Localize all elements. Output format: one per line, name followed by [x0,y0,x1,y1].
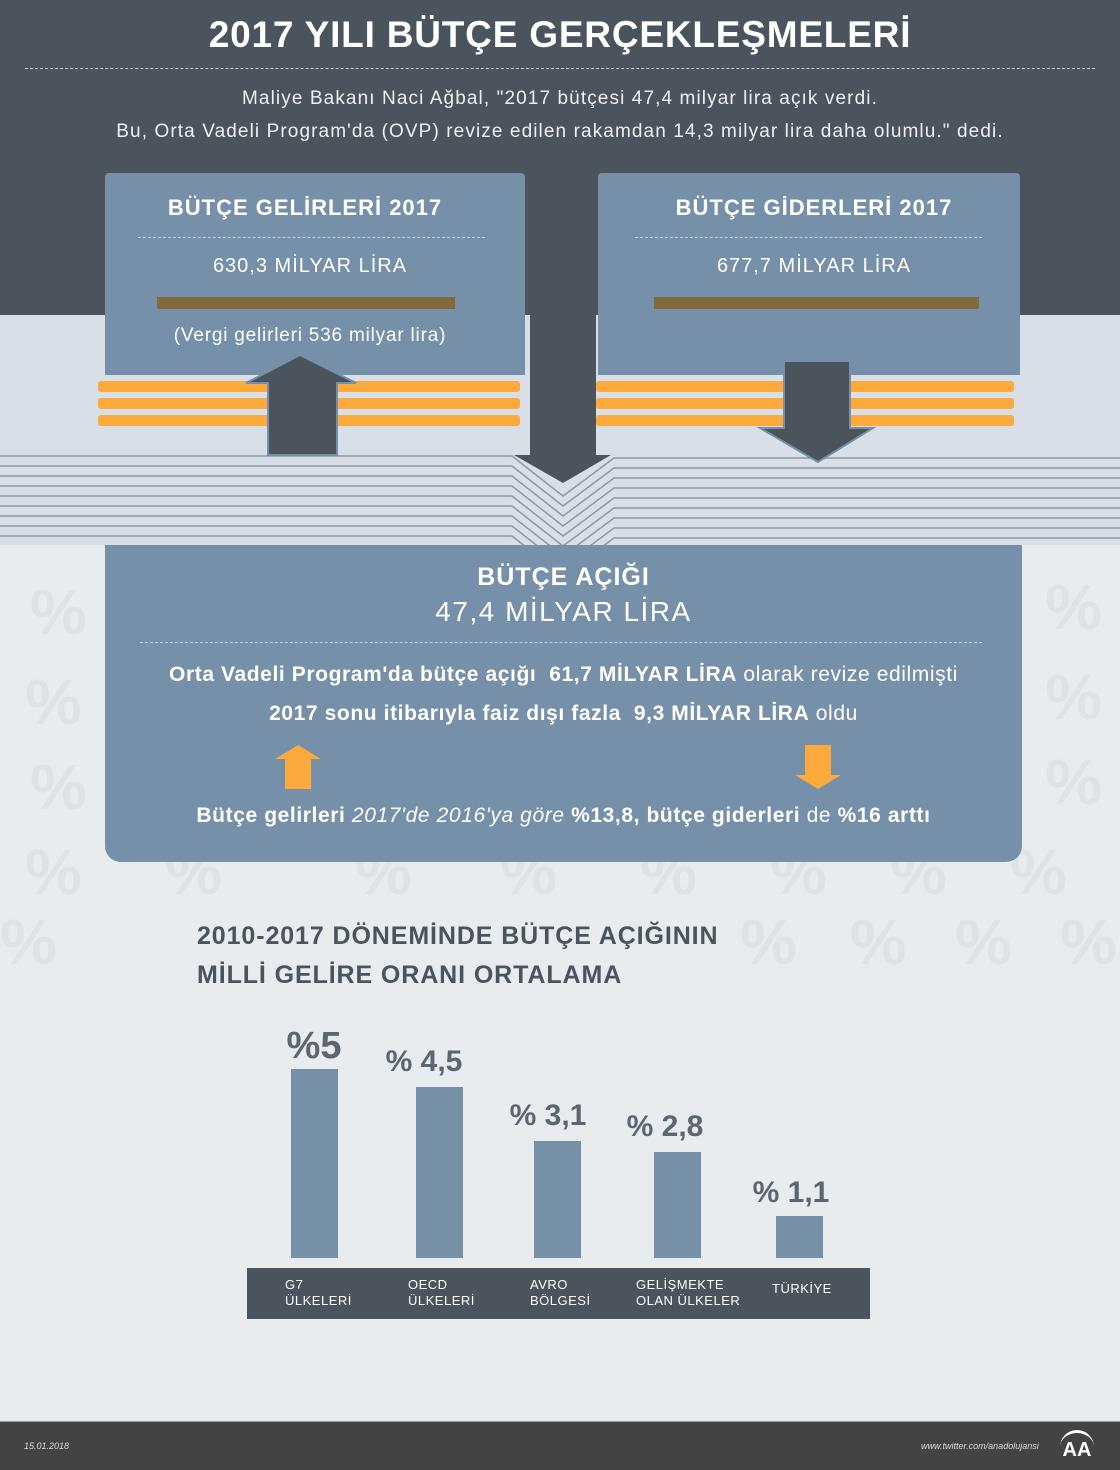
bar chart: % 3,1 [510,1099,586,1132]
bar chart: G7 [285,1277,303,1292]
footer: www.twitter.com/anadolujansi [921,1441,1039,1451]
background pattern: % [500,836,557,908]
background pattern: % [640,836,697,908]
footer [0,1421,1120,1470]
bar chart: % 4,5 [386,1045,462,1078]
background pattern [0,571,1117,978]
panel: budget deficit: 47,4 MİLYAR LİRA [435,596,692,627]
arrows [246,315,876,483]
bar chart: ÜLKELERİ [408,1293,475,1308]
background pattern: % [850,906,907,978]
background pattern: % [165,836,222,908]
icon: AA logo [1060,1430,1094,1464]
panel: expenditures [598,173,1020,375]
arrow: down expenditure [760,361,873,462]
title: 2017 YILI BÜTÇE GERÇEKLEŞMELERİ [209,14,911,55]
chart title [197,922,718,989]
background pattern: % [0,906,57,978]
bar chart: %5 [287,1025,341,1067]
bar chart: ÜLKELERİ [285,1293,352,1308]
background pattern: % [355,836,412,908]
subtitle: Bu, Orta Vadeli Program'da (OVP) revize edilen rakamdan 14,3 milyar lira daha olumlu." dedi. [116,121,1004,142]
background pattern: % [1045,571,1102,643]
bar chart: BÖLGESİ [530,1293,591,1308]
bar chart: % 1,1 [753,1176,829,1209]
arrow: center down [514,175,611,483]
icon: orange up arrow [275,745,321,789]
bar chart: GELİŞMEKTE [636,1277,724,1292]
arrow: up revenue [246,355,356,455]
background pattern: % [1010,836,1067,908]
icon: orange down arrow [795,745,841,789]
decorative lines [0,455,1120,545]
background: dark header [0,0,1120,315]
chart title: MİLLİ GELİRE ORANI ORTALAMA [197,961,622,989]
background: light band [0,315,1120,545]
background pattern: % [740,906,797,978]
panel: budget deficit: 2017 sonu itibarıyla faiz dışı fazla 9,3 MİLYAR LİRA oldu [269,702,858,725]
panel: budget deficit: Orta Vadeli Program'da bütçe açığı 61,7 MİLYAR LİRA olarak revize edilmişti [169,663,958,686]
background pattern: % [30,751,87,823]
bar chart: TÜRKİYE [772,1281,832,1296]
background pattern: % [955,906,1012,978]
panel: revenues: 630,3 MİLYAR LİRA [213,255,407,277]
chart title: 2010-2017 DÖNEMİNDE BÜTÇE AÇIĞININ [197,922,718,950]
panel: revenues: BÜTÇE GELİRLERİ 2017 [168,195,442,220]
background pattern: % [1045,661,1102,733]
icon: AA logo: AA [1063,1439,1091,1461]
orange stripes [98,381,1014,426]
background pattern: % [25,666,82,738]
footer: 15.01.2018 [24,1441,69,1451]
bar chart: OECD [408,1277,448,1292]
panel: budget deficit: BÜTÇE AÇIĞI [477,563,650,591]
panel: expenditures: BÜTÇE GİDERLERİ 2017 [676,195,952,220]
bar chart: % 2,8 [627,1110,703,1143]
background pattern: % [890,836,947,908]
panel: revenues: (Vergi gelirleri 536 milyar lira) [174,325,446,346]
panel: expenditures: 677,7 MİLYAR LİRA [717,255,911,277]
subtitle [116,88,1004,142]
background pattern: % [25,836,82,908]
panel: revenues [105,173,525,375]
background pattern: % [1045,746,1102,818]
panel: budget deficit [105,545,1022,862]
background pattern: % [1060,906,1117,978]
bar chart: AVRO [530,1277,568,1292]
background pattern: % [770,836,827,908]
background pattern: % [30,576,87,648]
bar chart: OLAN ÜLKELER [636,1293,740,1308]
subtitle: Maliye Bakanı Naci Ağbal, "2017 bütçesi 47,4 milyar lira açık verdi. [242,88,878,109]
panel: budget deficit: Bütçe gelirleri 2017'de 2016'ya göre %13,8, bütçe giderleri de %16 arttı [196,804,931,827]
